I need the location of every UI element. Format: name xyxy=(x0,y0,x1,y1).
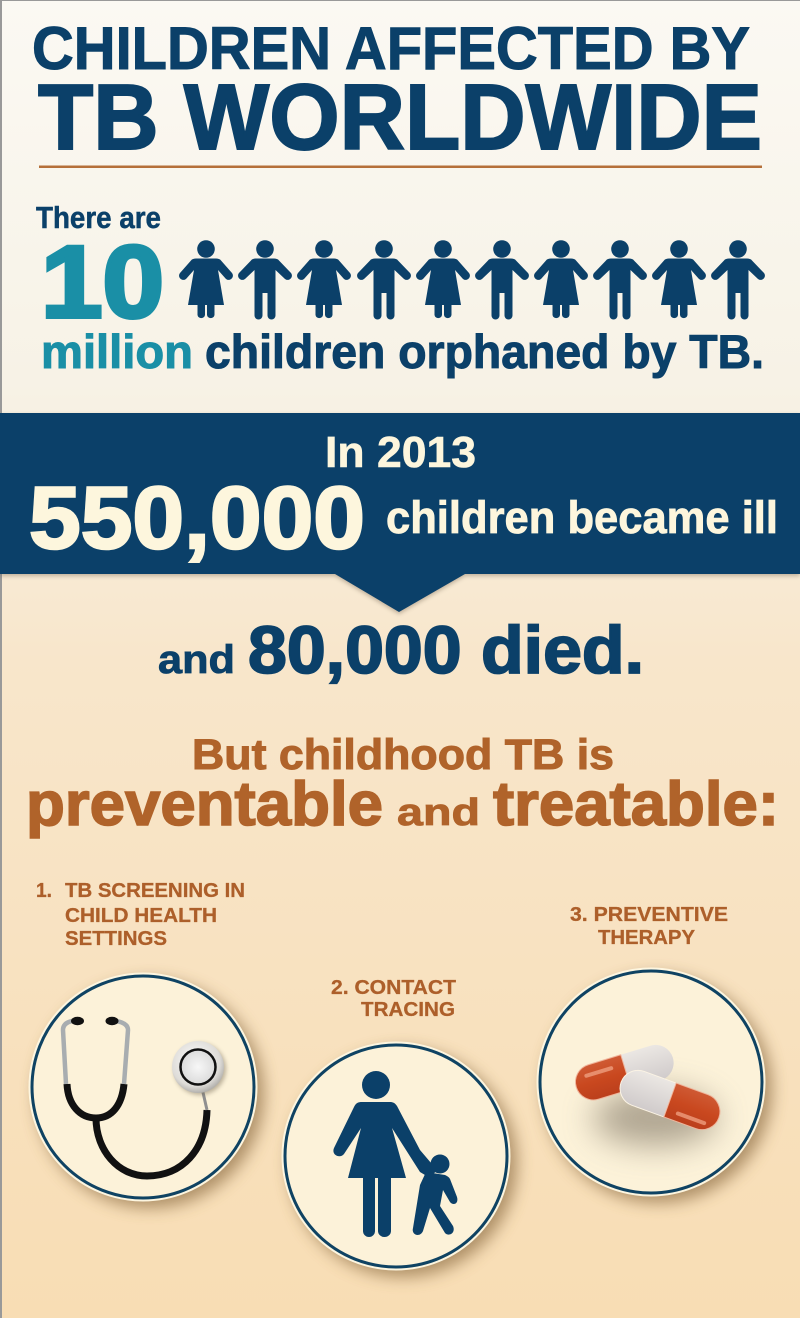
list item 1: TB screening: 1. xyxy=(36,880,52,902)
heading: preventable and treatable xyxy=(26,731,779,839)
text: in 2013: In 2013 xyxy=(325,428,476,477)
list item 1: TB screening xyxy=(36,880,245,950)
list item 2: contact tracing: 2. CONTACT xyxy=(331,977,456,999)
icon: parent and child circle xyxy=(282,1042,517,1277)
text: children orphaned by TB: children orphaned by TB. xyxy=(205,325,764,378)
list item 3: preventive therapy xyxy=(570,904,728,949)
icons: row of ten children xyxy=(179,240,765,320)
list item 3: preventive therapy: 3. PREVENTIVE xyxy=(570,904,728,926)
heading: preventable and treatable: treatable: xyxy=(493,770,779,839)
title: CHILDREN AFFECTED BY xyxy=(32,15,750,82)
capsules xyxy=(571,1040,725,1146)
panel: orphaned children statistic xyxy=(36,200,765,378)
list item 3: preventive therapy: THERAPY xyxy=(598,927,696,949)
list item 1: TB screening: SETTINGS xyxy=(65,928,167,950)
list item 1: TB screening: TB SCREENING IN xyxy=(65,880,245,902)
text: children became ill: children became ill xyxy=(386,492,778,543)
icon: stethoscope circle xyxy=(28,972,264,1208)
text: and 80,000 died: and xyxy=(158,638,235,682)
panel: 2013 banner with arrow xyxy=(0,413,800,614)
heading: preventable and treatable: and xyxy=(397,792,480,834)
heading: preventable and treatable: But childhood TB is xyxy=(192,731,614,779)
heading: preventable and treatable: preventable xyxy=(26,770,383,839)
mother figure and child xyxy=(333,1071,457,1237)
number: 550,000: 550,000 xyxy=(29,468,365,567)
number: 10: 10 xyxy=(41,225,164,339)
list item 2: contact tracing xyxy=(331,977,456,1021)
text: million: million xyxy=(41,325,193,378)
icon: capsules circle xyxy=(536,968,772,1203)
title xyxy=(32,15,762,169)
stethoscope xyxy=(63,1017,226,1176)
list item 1: TB screening: CHILD HEALTH xyxy=(65,905,217,927)
list item 2: contact tracing: TRACING xyxy=(361,999,455,1021)
text: there are: There are xyxy=(36,200,161,235)
text: and 80,000 died: 80,000 died. xyxy=(248,613,644,688)
title: TB WORLDWIDE xyxy=(38,65,762,169)
